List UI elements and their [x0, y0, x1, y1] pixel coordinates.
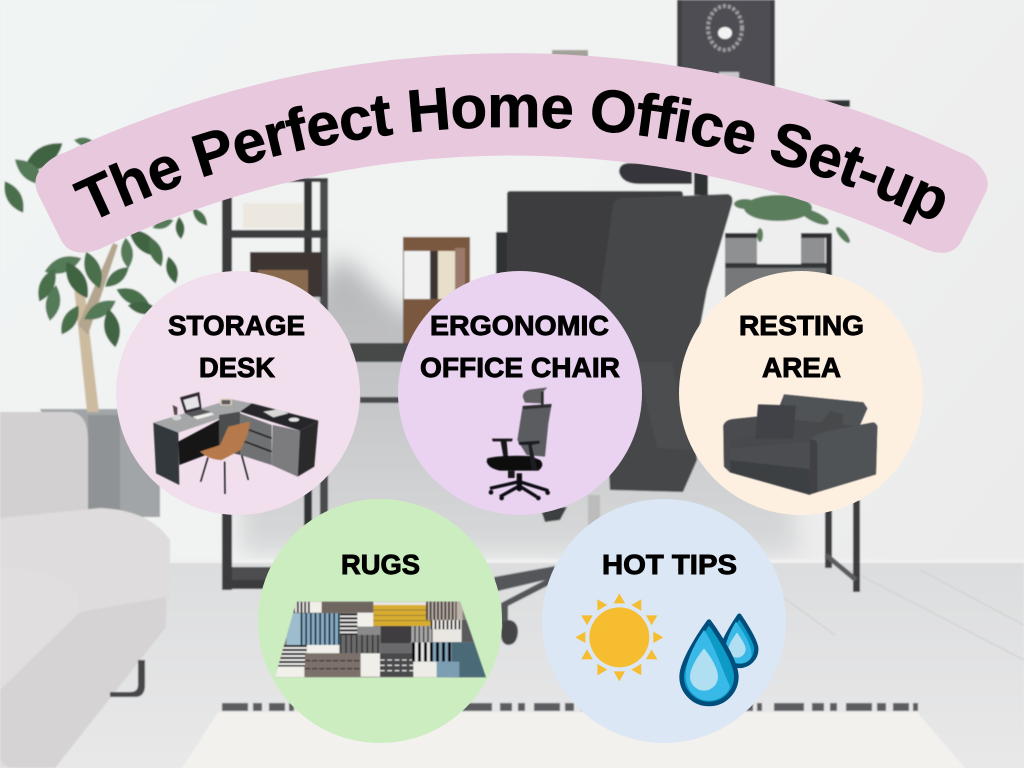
floor: [0, 563, 1024, 768]
circle: [398, 271, 642, 515]
heading: HOT TIPS: [602, 549, 737, 580]
heading: [168, 310, 305, 383]
icon: L-shaped desk with chair: [153, 392, 318, 494]
white area rug on floor: [182, 712, 965, 768]
right shelf with pot and plant: [725, 233, 830, 238]
plant trunk: [74, 285, 99, 412]
heading: STORAGE: [168, 310, 305, 341]
heading: ERGONOMIC: [430, 310, 609, 341]
desk surface: [350, 343, 830, 362]
icon: office chair: [487, 387, 552, 500]
heading: DESK: [199, 352, 275, 383]
wall shadow: [240, 255, 800, 555]
desk legs: [825, 510, 832, 568]
icon: patchwork rug: [273, 600, 490, 678]
heading: RESTING: [739, 310, 864, 341]
grey sofa: [0, 412, 170, 768]
panel: hot tips: [542, 499, 786, 743]
circle: [542, 499, 786, 743]
title banner: [35, 53, 988, 253]
panel: resting area: [679, 271, 923, 515]
icon: grey loveseat sofa: [723, 394, 877, 495]
circle: [679, 271, 923, 515]
heading: [420, 310, 620, 383]
upper wall shelf: [790, 100, 850, 107]
icon: sun: [575, 593, 663, 681]
heading: AREA: [762, 352, 841, 383]
title text: The Perfect Home Office Set-up: [72, 87, 945, 225]
binder boxes: [403, 237, 470, 345]
panel: rugs: [258, 499, 502, 743]
left shelving unit: [222, 178, 232, 590]
panel: storage desk: [116, 271, 360, 515]
circle: [258, 499, 502, 743]
heading: OFFICE CHAIR: [420, 352, 620, 383]
icon: water drops: [682, 616, 756, 704]
heading: RUGS: [341, 549, 420, 580]
floor plant pot: [40, 409, 160, 517]
panel: ergonomic office chair: [398, 271, 642, 515]
heading: [739, 310, 864, 383]
banner shape: [35, 53, 988, 253]
office chair: [494, 163, 732, 645]
poster on wall: [677, 0, 775, 92]
plant leaves: [0, 136, 211, 349]
circle: [116, 271, 360, 515]
